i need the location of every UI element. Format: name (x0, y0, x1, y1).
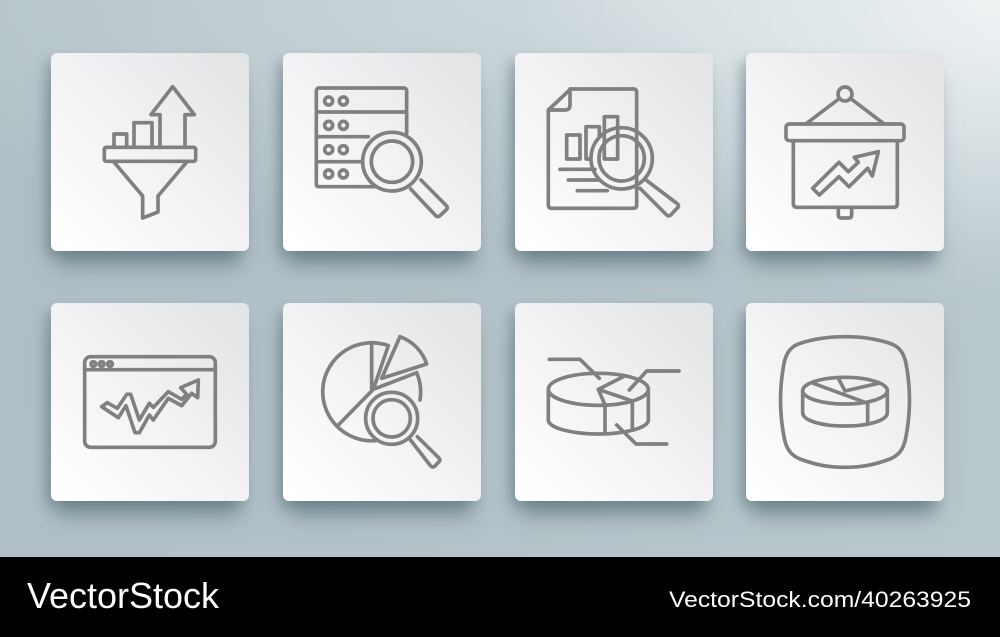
icon: document with magnifier (548, 89, 678, 216)
footer bar (0, 557, 1000, 637)
panel: document analysis card (514, 53, 712, 251)
icon: pie chart with magnifier (323, 337, 440, 467)
panel: presentation board card (746, 53, 944, 251)
panel: 3D pie labels card (514, 303, 712, 501)
image id text: VectorStock.com/40263925 (669, 587, 971, 612)
logo text: VectorStock (27, 575, 220, 616)
panel: browser chart card (51, 303, 249, 501)
icon: presentation board with arrow (786, 87, 904, 218)
icon: squircle with pie chart (781, 337, 909, 467)
panel: squircle pie card (746, 303, 944, 501)
panel: server search card (283, 53, 481, 251)
icon: 3D pie chart with label lines (548, 359, 679, 444)
icon: funnel with bars and arrow (104, 87, 196, 218)
panel: funnel card (51, 53, 249, 251)
icon: browser window with chart (85, 357, 215, 447)
panel: pie search card (283, 303, 481, 501)
icon: server with magnifier (316, 88, 447, 217)
